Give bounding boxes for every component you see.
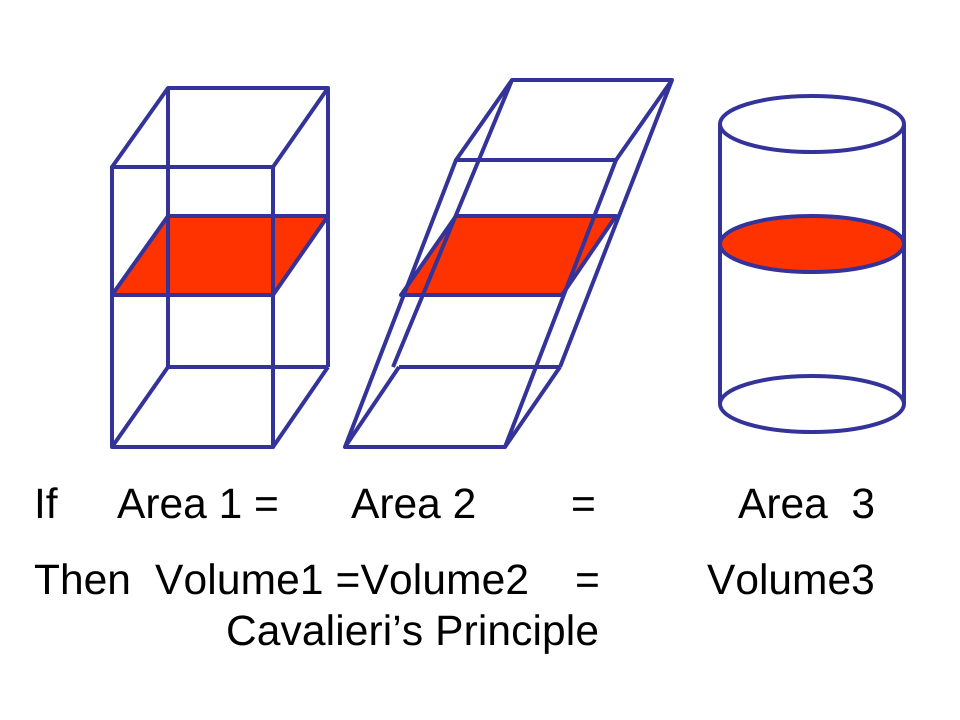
text: area equation	[34, 481, 875, 528]
shape: oblique prism	[345, 80, 672, 447]
text: volume equation	[34, 557, 875, 604]
text: volume equation: Then	[34, 557, 131, 604]
text: area equation: Area 2	[351, 481, 476, 528]
text: area equation: If	[34, 481, 58, 528]
text: area equation: Area 1 =	[117, 481, 279, 528]
text: principle name: Cavalieri’s Principle	[226, 608, 599, 655]
text: area equation: Area 3	[738, 481, 875, 528]
text: volume equation: Volume1 =Volume2	[155, 557, 529, 604]
text: area equation: =	[571, 481, 596, 528]
text: volume equation: Volume3	[707, 557, 875, 604]
shape: cylinder	[720, 96, 904, 432]
shape: rectangular prism	[112, 88, 328, 447]
text: volume equation: =	[575, 557, 600, 604]
